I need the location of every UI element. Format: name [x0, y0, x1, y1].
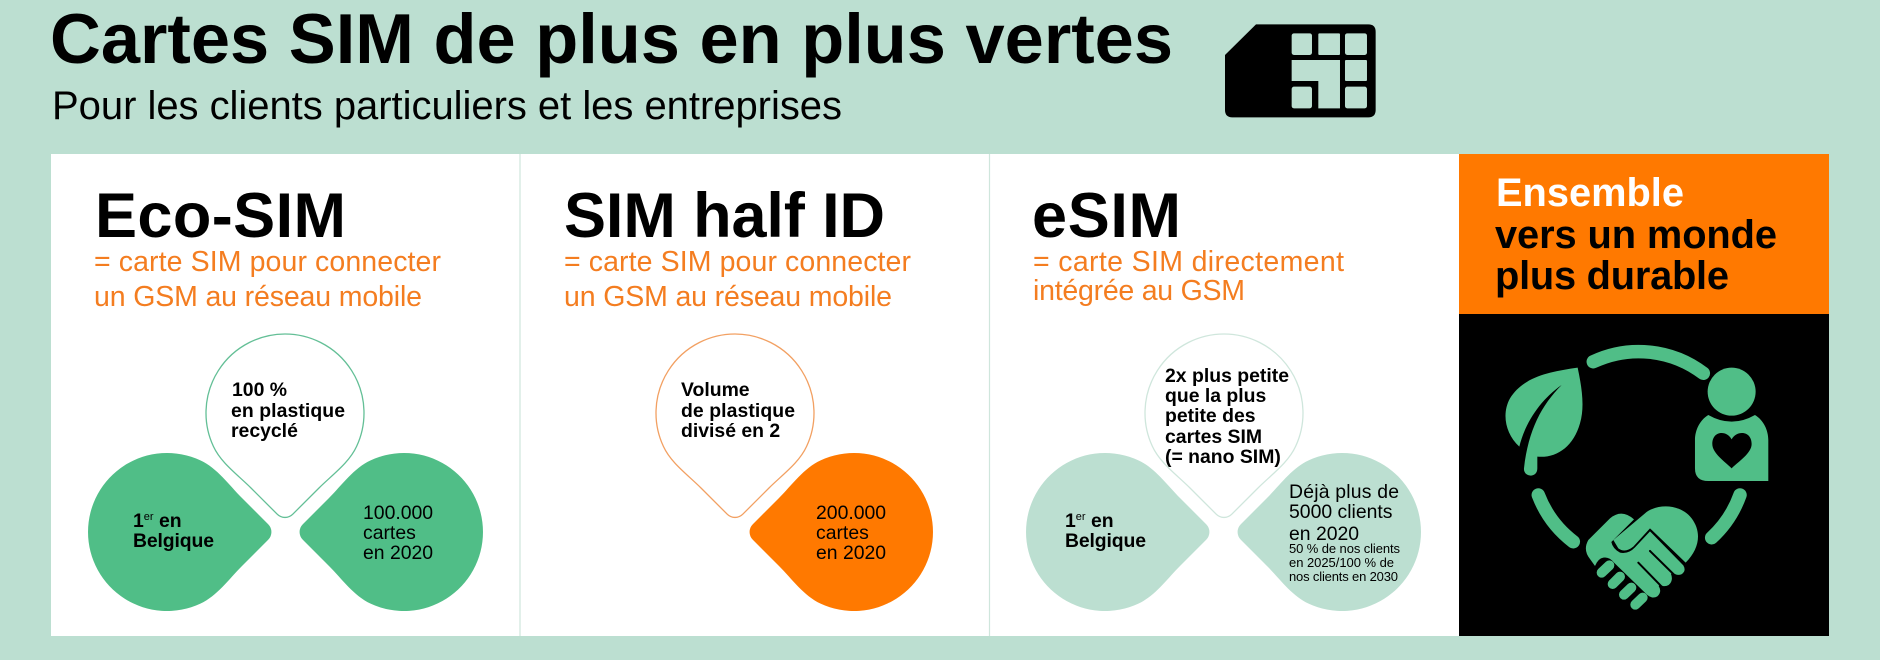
icon: person with heart — [1695, 368, 1768, 481]
panel: eSIM — [1026, 181, 1421, 611]
description: SIM half ID: = carte SIM pour connecter — [564, 246, 912, 278]
drop: 100 % recycled plastic: 100 % — [232, 379, 287, 401]
drop: twice smaller than nano SIM: petite des — [1165, 405, 1256, 427]
drop: 5000 clients in 2020: en 2020 — [1289, 523, 1359, 545]
drop: 200.000 cards: cartes — [816, 522, 869, 544]
drop: first in Belgium: 1 — [133, 510, 144, 532]
description: Eco-SIM: = carte SIM pour connecter — [94, 246, 442, 278]
drop: 5000 clients in 2020: 5000 clients — [1289, 501, 1392, 523]
panel: orange slogan: Ensemble — [1496, 171, 1684, 215]
drop: first in Belgium: er — [144, 511, 154, 523]
drop: twice smaller than nano SIM: (= nano SIM) — [1165, 446, 1281, 468]
arcs: ring segments — [1538, 352, 1740, 542]
description: eSIM: intégrée au GSM — [1033, 275, 1245, 307]
panel: SIM half ID — [564, 181, 933, 611]
drop: 5000 clients in 2020: 50 % de nos clients — [1289, 541, 1400, 556]
drop: first in Belgium: en — [154, 510, 182, 532]
drop: 100 % recycled plastic — [206, 334, 364, 517]
drop: 100 % recycled plastic: en plastique — [231, 400, 345, 422]
drop: plastic volume divided by 2: Volume — [681, 379, 750, 401]
panel: Eco-SIM — [88, 181, 483, 611]
drop: twice smaller than nano SIM: cartes SIM — [1165, 426, 1262, 448]
drop: twice smaller than nano SIM: que la plus — [1165, 385, 1266, 407]
icon: sustainability ring — [1505, 352, 1768, 605]
icon: leaf — [1505, 368, 1583, 476]
drop: 100 % recycled plastic: recyclé — [231, 420, 298, 442]
panel: black icon area — [1459, 314, 1829, 636]
drop: 100.000 cards: 100.000 — [363, 502, 433, 524]
subtitle: Pour les clients particuliers et les entreprises — [52, 84, 842, 128]
drop: 100.000 cards — [300, 453, 483, 611]
description: eSIM — [1033, 246, 1344, 307]
drop: 5000 clients in 2020 — [1238, 453, 1421, 611]
drop: plastic volume divided by 2: de plastique — [681, 400, 795, 422]
drop: twice smaller than nano SIM: 2x plus petite — [1165, 365, 1289, 387]
description: Eco-SIM: un GSM au réseau mobile — [94, 281, 422, 313]
drop: first in Belgium: en — [1086, 510, 1114, 532]
icon: SIM card — [1225, 24, 1376, 117]
description: Eco-SIM — [94, 246, 442, 313]
drop: plastic volume divided by 2: divisé en 2 — [681, 420, 780, 442]
panel: orange slogan: vers un monde — [1495, 213, 1777, 257]
panel: orange slogan: plus durable — [1495, 254, 1729, 298]
drop: first in Belgium — [1026, 453, 1209, 611]
drop: first in Belgium: Belgique — [1065, 530, 1146, 552]
drop: 5000 clients in 2020: en 2025/100 % de — [1289, 555, 1394, 570]
heading: eSIM: eSIM — [1032, 181, 1181, 251]
panel: orange slogan — [1459, 154, 1829, 314]
panel: white background — [51, 154, 1459, 636]
drop: 5000 clients in 2020: Déjà plus de — [1289, 481, 1399, 503]
icon: handshake — [1586, 506, 1698, 605]
heading: Eco-SIM: Eco-SIM — [95, 181, 346, 251]
description: eSIM: = carte SIM directement — [1033, 246, 1344, 278]
header title: Cartes SIM de plus en plus vertes — [50, 0, 1173, 78]
drop: first in Belgium: er — [1076, 511, 1086, 523]
heading: SIM half ID: SIM half ID — [564, 181, 885, 251]
drop: first in Belgium — [88, 453, 271, 611]
drop: 100.000 cards: en 2020 — [363, 542, 433, 564]
drop: plastic volume divided by 2 — [656, 334, 814, 517]
description: SIM half ID — [564, 246, 912, 313]
description: SIM half ID: un GSM au réseau mobile — [564, 281, 892, 313]
drop: 5000 clients in 2020: nos clients en 2030 — [1289, 569, 1398, 584]
drop: 200.000 cards: 200.000 — [816, 502, 886, 524]
drop: first in Belgium: Belgique — [133, 530, 214, 552]
drop: first in Belgium: 1 — [1065, 510, 1076, 532]
drop: twice smaller than nano SIM — [1145, 334, 1303, 517]
drop: 100.000 cards: cartes — [363, 522, 416, 544]
drop: 200.000 cards — [750, 453, 933, 611]
drop: 200.000 cards: en 2020 — [816, 542, 886, 564]
